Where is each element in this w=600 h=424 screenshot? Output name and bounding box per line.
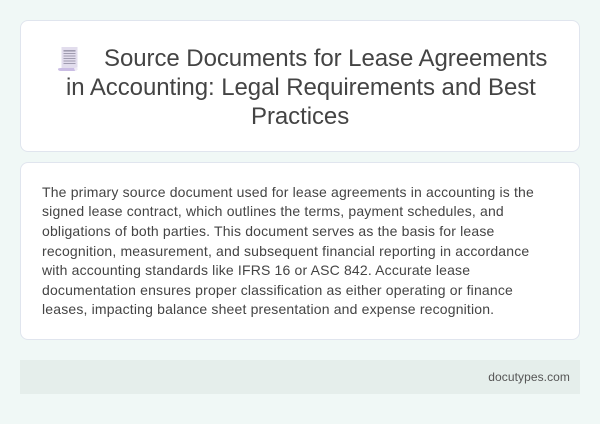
panel: description card (20, 162, 580, 340)
text block: description: leases, impacting balance sheet presentation and expense recognition. (42, 301, 494, 317)
text block: description: documentation ensures proper classification as either operating or finance (42, 282, 513, 298)
text block: description: The primary source document used for lease agreements in accounting is the (42, 184, 534, 200)
text block: description: obligations of both parties. This document serves as the basis for lease (42, 223, 494, 239)
title: in Accounting: Legal Requirements and Best (66, 74, 536, 101)
footer bar (20, 360, 580, 394)
footer text: docutypes.com (488, 370, 570, 384)
icon: document receipt (58, 47, 78, 71)
text block: description: signed lease contract, which outlines the terms, payment schedules, and (42, 203, 504, 219)
panel: title card (20, 20, 580, 152)
title: Source Documents for Lease Agreements (104, 45, 547, 72)
text block: description: recognition, measurement, and subsequent financial reporting in accordance (42, 243, 529, 259)
text block: description (42, 184, 534, 317)
title: Practices (251, 103, 349, 130)
title (66, 45, 547, 130)
text block: description: with accounting standards like IFRS 16 or ASC 842. Accurate lease (42, 262, 470, 278)
